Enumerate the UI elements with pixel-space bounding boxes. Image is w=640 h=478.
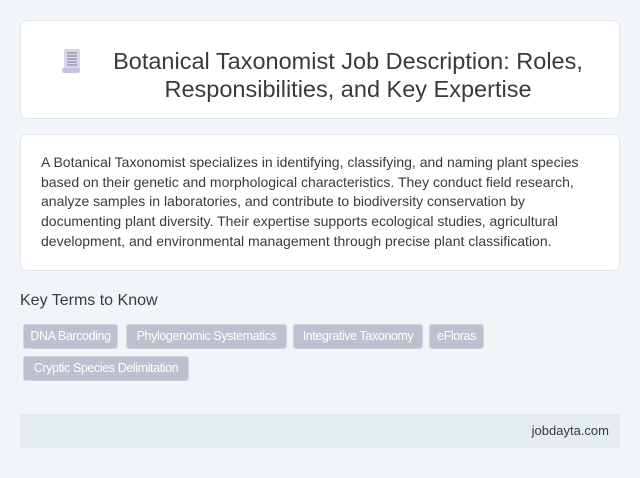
- tag: Cryptic Species Delimitation: [23, 356, 189, 381]
- icon: document: [62, 49, 80, 73]
- footer text: jobdayta.com: [532, 423, 609, 438]
- tag: Integrative Taxonomy: Integrative Taxonomy: [303, 329, 413, 343]
- footer: [20, 414, 620, 448]
- description text: A Botanical Taxonomist specializes in identifying, classifying, and naming plant species based on their genetic and morphological characteristics. They conduct field research, analyze samples in laboratories, and contribute to biodiversity conservation by documenting plant diversity. Their expertise supports ecological studies, agricultural development, and environmental management through precise plant classification.: [41, 154, 578, 249]
- tag: Integrative Taxonomy: [293, 324, 423, 349]
- tag: Phylogenomic Systematics: [126, 324, 287, 349]
- tag: DNA Barcoding: [23, 324, 118, 349]
- tag: DNA Barcoding: DNA Barcoding: [30, 329, 111, 343]
- title: Botanical Taxonomist Job Description: Roles, Responsibilities, and Key Expertise: [113, 48, 583, 102]
- tag: Cryptic Species Delimitation: Cryptic Species Delimitation: [34, 361, 178, 375]
- tag: Phylogenomic Systematics: Phylogenomic Systematics: [137, 329, 276, 343]
- heading: key terms: Key Terms to Know: [20, 292, 158, 309]
- header card: [20, 20, 620, 119]
- tag: eFloras: [429, 324, 484, 349]
- tag: eFloras: eFloras: [437, 329, 476, 343]
- description card: [20, 134, 620, 271]
